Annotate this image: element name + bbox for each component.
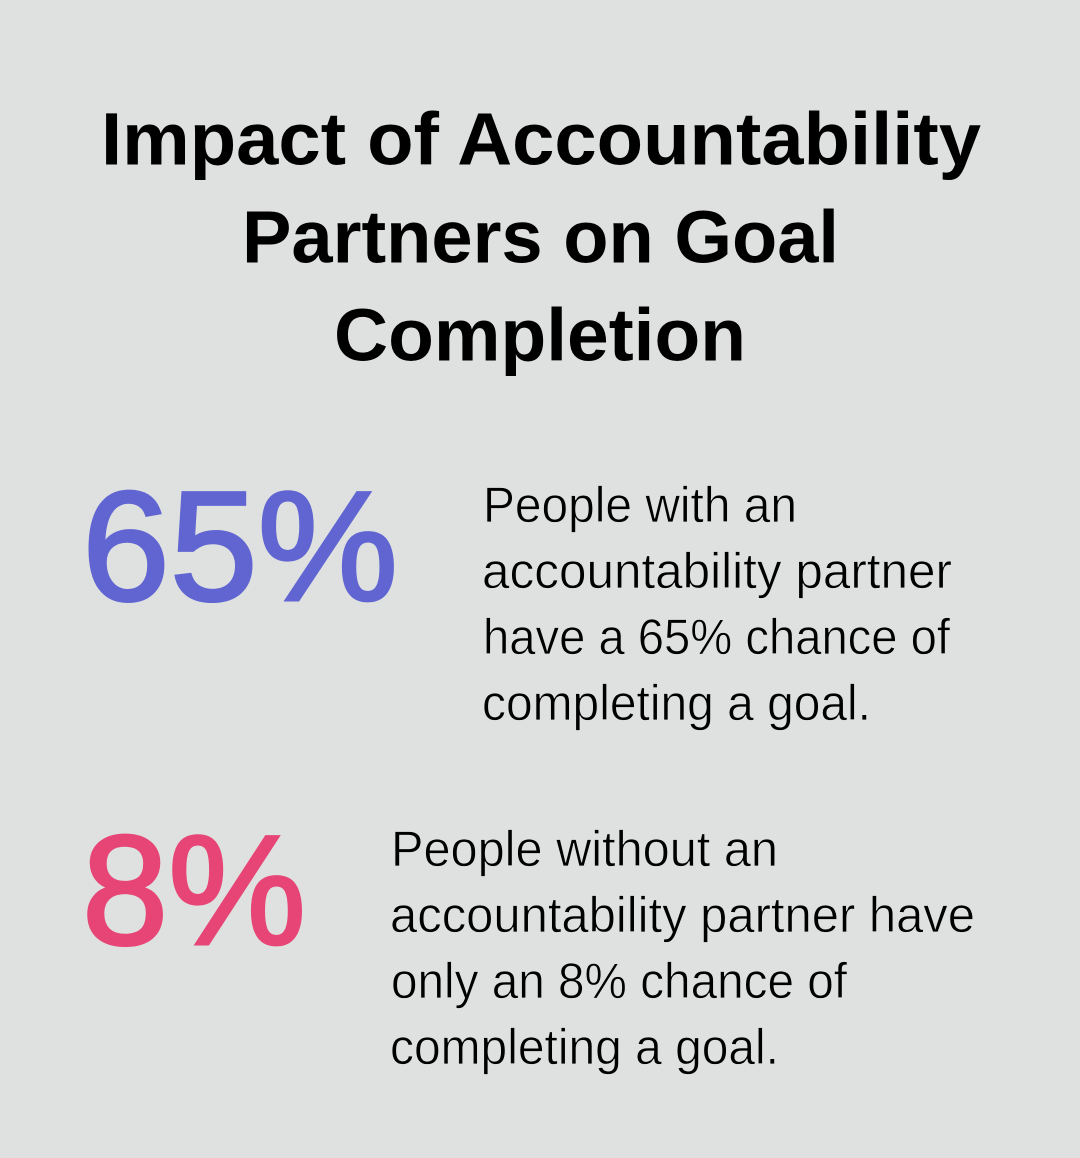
- title: Completion: [334, 294, 746, 376]
- stat: 8%: 8%: [82, 804, 306, 978]
- text block: without a partner: only an 8% chance of: [391, 953, 847, 1009]
- title: Impact of Accountability: [101, 98, 981, 180]
- text block: with a partner: People with an: [483, 477, 797, 533]
- title: Partners on Goal: [242, 196, 839, 278]
- text block: without a partner: People without an: [391, 821, 778, 877]
- stat: 65%: 65%: [82, 460, 398, 634]
- text block: with a partner: accountability partner: [482, 543, 952, 599]
- text block: without a partner: completing a goal.: [390, 1019, 779, 1075]
- text block: without a partner: [390, 821, 975, 1075]
- text block: with a partner: [482, 477, 952, 731]
- title: [101, 98, 981, 376]
- text block: with a partner: have a 65% chance of: [483, 609, 950, 665]
- text block: with a partner: completing a goal.: [482, 675, 871, 731]
- text block: without a partner: accountability partner have: [390, 887, 975, 943]
